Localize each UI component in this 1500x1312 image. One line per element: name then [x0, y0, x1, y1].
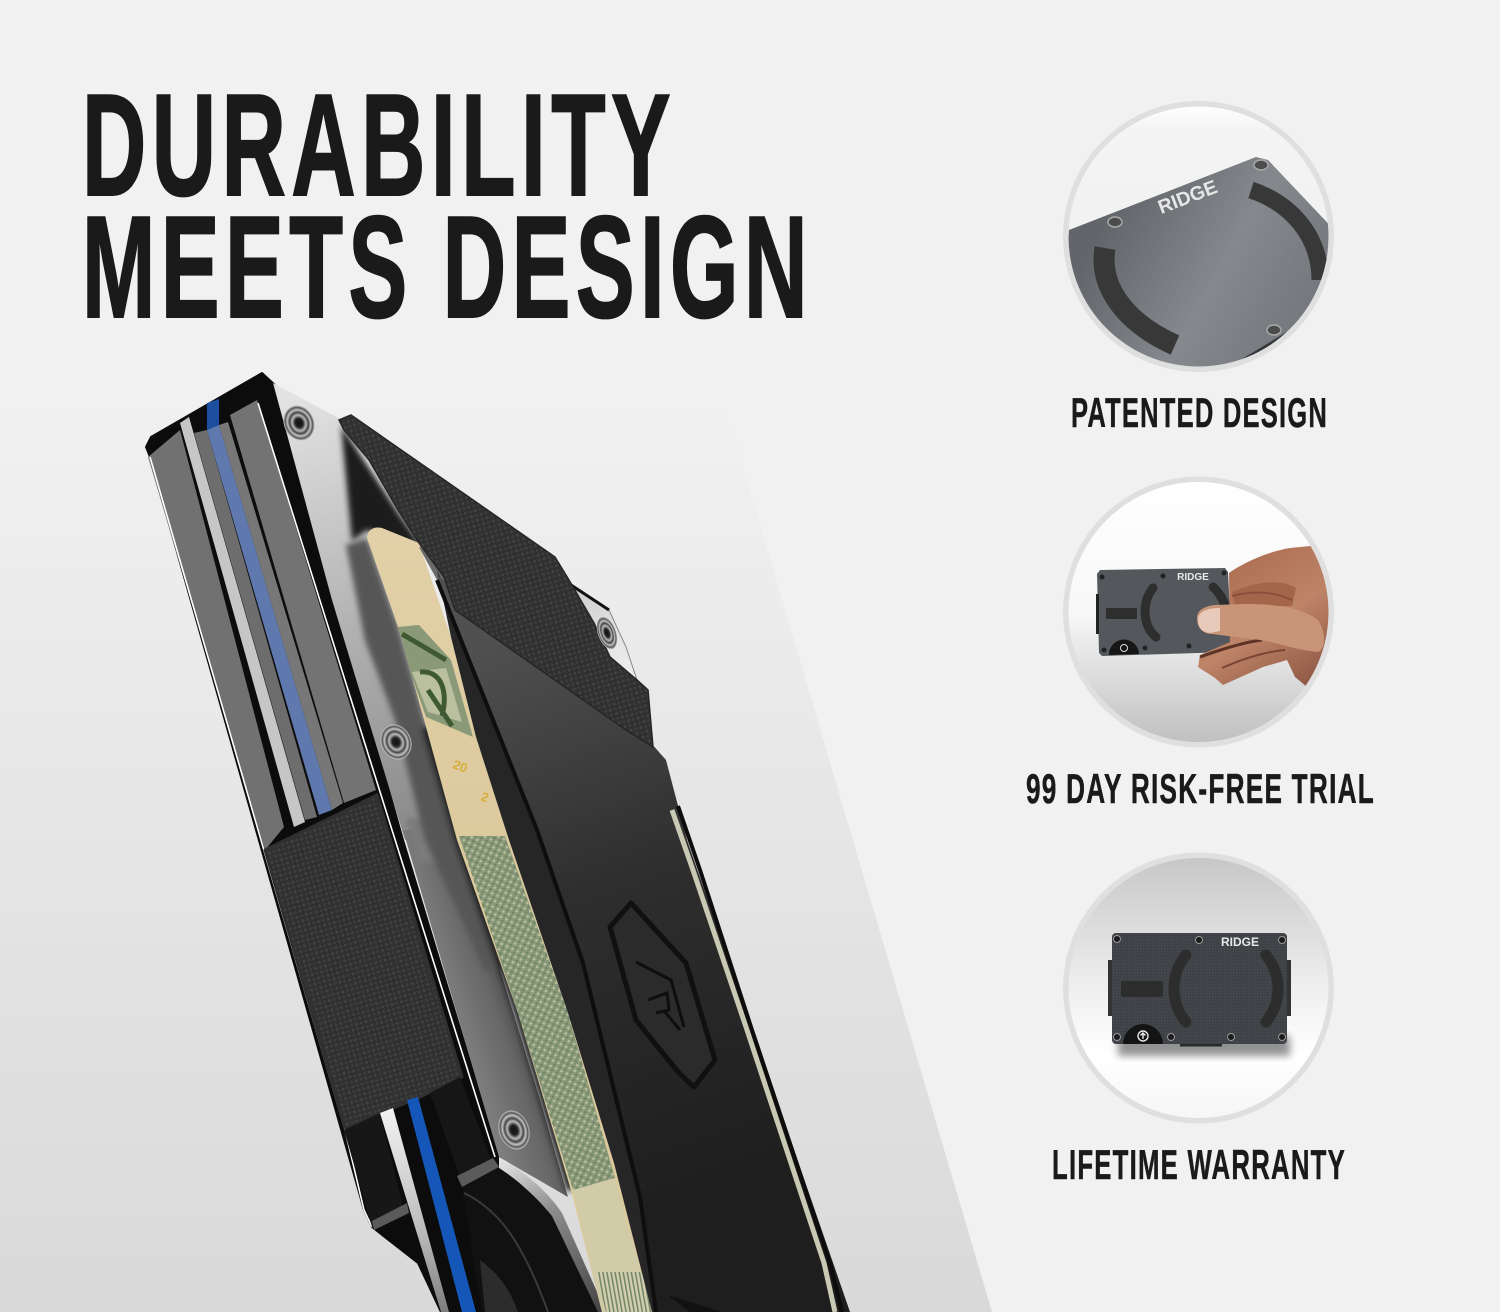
wallet steel plate: [273, 383, 571, 1197]
wallet lower corner: [462, 1157, 606, 1312]
circle frame: lifetime warranty: [1066, 855, 1331, 1121]
wallet illustration: [146, 373, 850, 1312]
bill portrait engraving: [398, 625, 473, 737]
label: patented design: PATENTED DESIGN: [1071, 389, 1328, 436]
rear screw: [593, 614, 621, 652]
diagonal background panel: [0, 360, 992, 1312]
panel: risk-free trial: [1066, 479, 1331, 745]
bumper right: [1251, 190, 1320, 280]
leather sleeve: [437, 575, 850, 1312]
title: DURABILITY: [82, 64, 676, 226]
wallet close-up: [1060, 157, 1340, 372]
wallet body: [146, 373, 602, 1312]
embossed hexagon logo: [610, 903, 715, 1087]
screws: [278, 400, 535, 1154]
brand text: RIDGE: [1155, 176, 1221, 219]
bill serial digits: 2: [479, 789, 491, 805]
rear plate corner: [571, 585, 642, 692]
hand holding wallet: [1096, 546, 1331, 687]
circle frame: patented design: [1066, 104, 1331, 369]
arrow icon: [1138, 1031, 1148, 1041]
title: [82, 64, 813, 348]
card: [1097, 568, 1232, 656]
title: MEETS DESIGN: [82, 186, 813, 348]
elastic band: upper flap: [339, 415, 653, 747]
card pocket: [419, 547, 460, 610]
brand text: RIDGE: [1177, 572, 1209, 583]
circle frame: risk-free trial: [1066, 479, 1331, 745]
panel: lifetime warranty: [1066, 855, 1331, 1121]
screws: [1108, 160, 1281, 335]
finger shading: [1232, 582, 1296, 606]
thumb: [1197, 604, 1324, 652]
elastic band: lower: [265, 795, 462, 1128]
bill serial digits: 20: [451, 757, 470, 776]
edge highlights: [150, 403, 495, 1227]
bill serial digits: [451, 757, 491, 805]
lower stripes: [344, 1077, 500, 1312]
wallet side stripes: [148, 399, 376, 850]
brand text: RIDGE: [1221, 935, 1259, 949]
bumper left: [1104, 248, 1175, 345]
dollar bill: [367, 527, 652, 1312]
panel: patented design: [1060, 104, 1340, 372]
hand: [1198, 546, 1331, 687]
wallet front view: [1108, 933, 1291, 1056]
